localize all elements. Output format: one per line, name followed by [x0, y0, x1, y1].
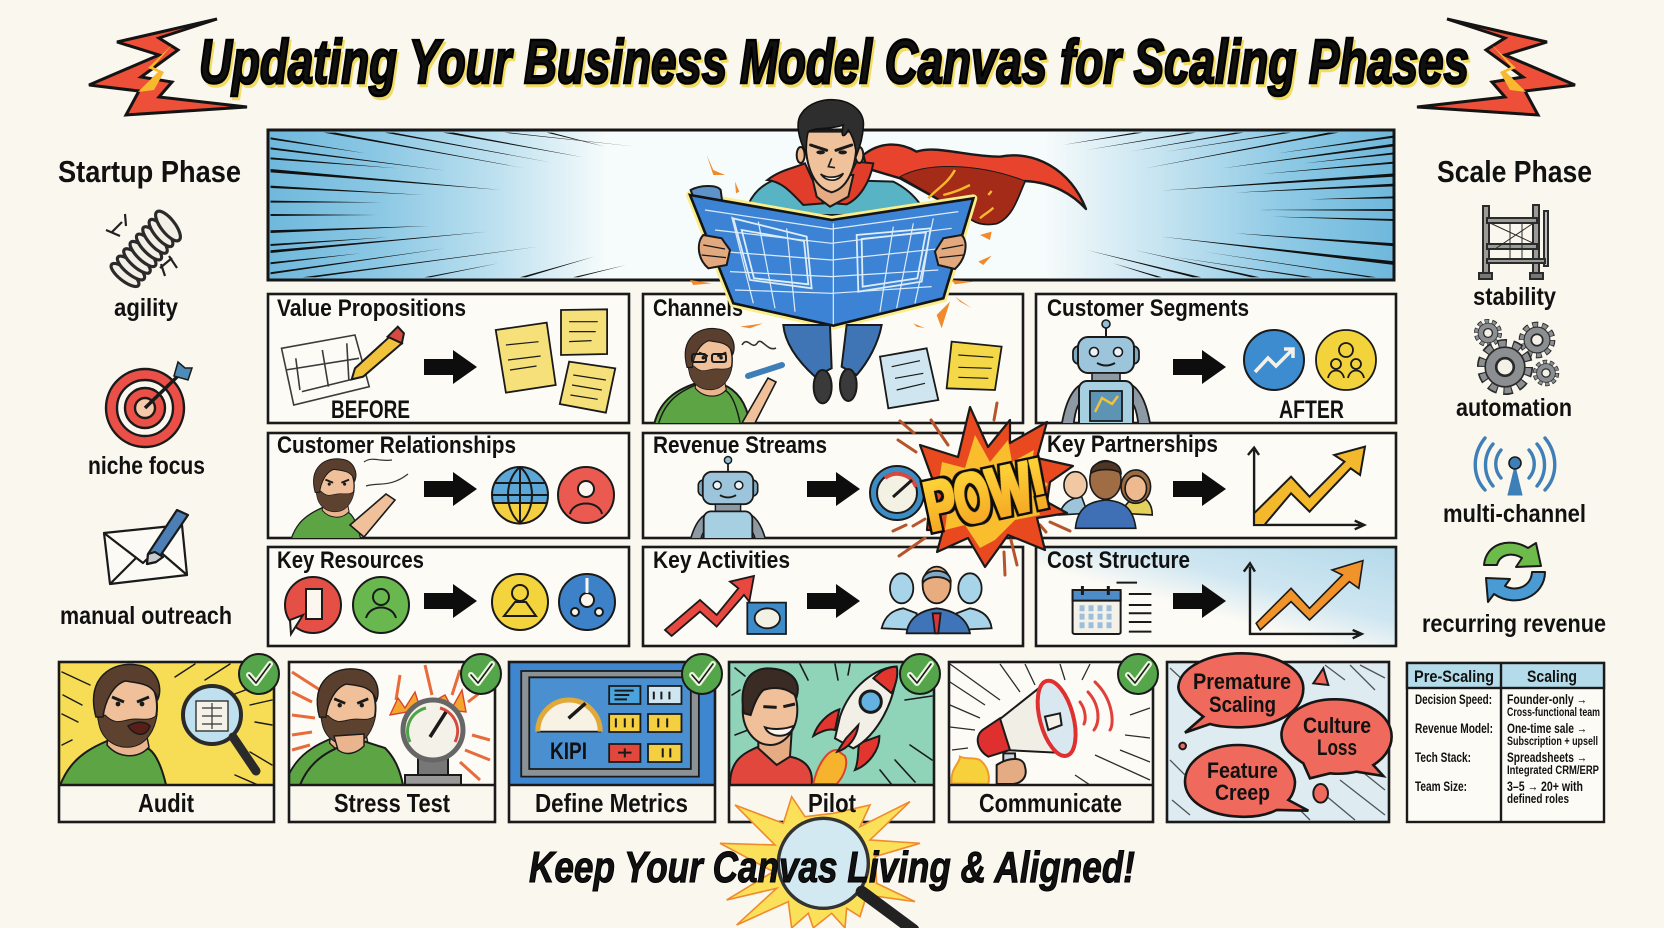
icon: robot	[690, 456, 766, 538]
bubble: feature creep: Creep	[1215, 780, 1270, 805]
bubble: premature scaling: Scaling	[1209, 692, 1276, 717]
illustration: man with pressure gauge	[290, 664, 490, 784]
panel: channels	[642, 292, 1024, 424]
arrow	[1173, 472, 1226, 506]
table header: Pre-Scaling	[1414, 667, 1494, 686]
illustration: KPI dashboard	[521, 671, 699, 777]
torso	[748, 178, 921, 215]
label: define metrics: Define Metrics	[535, 788, 688, 818]
icon: pinned note	[880, 342, 1002, 408]
icon: antenna (multi-channel)	[1475, 438, 1555, 495]
bubble: feature creep	[1185, 745, 1308, 817]
icon: yellow person badge	[492, 574, 548, 630]
panel: cost structure	[1036, 547, 1396, 646]
icon: team of three	[882, 567, 992, 633]
label: recurring revenue: recurring revenue	[1422, 610, 1606, 638]
icon: blue growth badge	[1244, 330, 1304, 390]
footer tagline: Keep Your Canvas Living & Aligned!	[529, 843, 1135, 892]
label: stress test: Stress Test	[334, 788, 450, 818]
arrow	[807, 584, 860, 618]
hands	[699, 235, 730, 268]
table row: team size: Team Size:	[1415, 778, 1467, 794]
arrow	[424, 350, 477, 384]
arrow	[424, 472, 477, 506]
illustration: megaphone	[950, 664, 1150, 785]
sparks	[690, 155, 992, 328]
icon: sketched grid and pencil	[282, 327, 404, 405]
table row: tech stack: Tech Stack:	[1415, 749, 1471, 765]
label: agility: agility	[114, 294, 178, 322]
POW burst	[893, 403, 1073, 575]
icon: person badge red	[558, 467, 614, 523]
heading: key partnerships: Key Partnerships	[1047, 431, 1218, 458]
heading: customer segments: Customer Segments	[1047, 295, 1249, 322]
neck	[812, 175, 853, 207]
table row: revenue model: Subscription + upsell	[1507, 734, 1598, 748]
text: POW!: POW!	[918, 444, 1053, 546]
hero legs	[783, 325, 882, 403]
panel: pitfalls speech bubbles	[1167, 653, 1392, 822]
table row: tech stack: Integrated CRM/ERP	[1507, 763, 1599, 777]
hero: superhero holding glowing blueprint	[690, 100, 1086, 328]
panel: revenue streams	[642, 432, 1024, 540]
icon: recurring arrows (recurring revenue)	[1484, 543, 1545, 602]
icon: scaffold (stability)	[1479, 205, 1548, 279]
heading: key resources: Key Resources	[277, 547, 424, 574]
blueprint sheet	[690, 195, 973, 326]
icon: robot	[1061, 319, 1151, 423]
step panel: audit	[52, 662, 274, 822]
icon: calendar and checklist	[1073, 583, 1151, 634]
heading: key activities: Key Activities	[653, 547, 790, 574]
title lightning bolt right	[1417, 19, 1575, 115]
heading: customer relationships: Customer Relationships	[277, 432, 516, 459]
left column heading: startup phase: Startup Phase	[58, 154, 241, 189]
table row: tech stack	[1415, 749, 1599, 777]
panel: key partnerships	[1036, 431, 1396, 538]
icon: target (niche focus)	[106, 362, 192, 447]
heading: value propositions: Value Propositions	[277, 295, 466, 322]
illustration: three partners	[1059, 461, 1152, 528]
arrow	[424, 584, 477, 618]
table row: decision speed	[1415, 691, 1600, 719]
icon: gears (automation)	[1476, 321, 1557, 390]
collar cape	[767, 162, 873, 205]
table row: team size: 3–5 → 20+ with	[1507, 778, 1583, 794]
label: audit: Audit	[138, 788, 194, 818]
chart: rising orange arrow	[1244, 561, 1363, 638]
bubble: culture loss: Culture	[1303, 713, 1371, 738]
right column heading: scale phase: Scale Phase	[1437, 154, 1592, 189]
panel: key resources	[268, 547, 629, 646]
heading: revenue streams: Revenue Streams	[653, 432, 827, 459]
decorations	[1179, 668, 1328, 803]
bubble: feature creep: Feature	[1207, 758, 1278, 783]
bubble: premature scaling	[1178, 653, 1303, 733]
label: before: BEFORE	[331, 396, 410, 424]
table row: decision speed: Decision Speed:	[1415, 691, 1492, 707]
icon: envelope and pen (manual outreach)	[104, 510, 188, 584]
table header: Scaling	[1527, 667, 1577, 686]
icon: yellow team badge	[1316, 330, 1376, 390]
panel: key activities	[643, 547, 1023, 646]
table row: decision speed: Founder-only →	[1507, 691, 1587, 707]
icon: red growth arrow and disc	[665, 576, 786, 636]
arrow	[807, 472, 860, 506]
panel: customer segments	[1034, 292, 1398, 424]
hero speed-line banner	[268, 130, 1394, 280]
panel: customer relationships	[266, 432, 630, 540]
table row: revenue model: One-time sale →	[1507, 720, 1587, 736]
text: KIPI: KIPI	[550, 738, 587, 765]
heading: cost structure: Cost Structure	[1047, 547, 1190, 574]
bubble: culture loss: Loss	[1317, 735, 1357, 760]
title lightning bolt left	[89, 19, 247, 115]
icon: spring (agility)	[106, 208, 185, 290]
cape	[863, 145, 1086, 224]
label: niche focus: niche focus	[88, 452, 205, 480]
label: stability: stability	[1473, 283, 1556, 311]
label: manual outreach: manual outreach	[60, 602, 232, 630]
glow	[690, 195, 973, 326]
icon: check badges	[239, 654, 1158, 694]
illustration: man with magnifier	[60, 663, 273, 784]
arrow	[1173, 584, 1226, 618]
comparison table	[1407, 663, 1604, 822]
face	[797, 147, 805, 163]
heading: channels: Channels	[653, 295, 743, 322]
table row: revenue model	[1415, 720, 1598, 748]
footer burst with magnifying glass	[720, 797, 920, 928]
bubble: culture loss	[1281, 699, 1392, 778]
label: multi-channel: multi-channel	[1443, 500, 1586, 528]
bubble: premature scaling: Premature	[1193, 669, 1291, 694]
step panel: pilot	[729, 662, 934, 822]
hair	[798, 100, 863, 155]
table row: revenue model: Revenue Model:	[1415, 720, 1493, 736]
table row: team size	[1415, 778, 1583, 806]
table row: tech stack: Spreadsheets →	[1507, 749, 1587, 765]
label: pilot: Pilot	[808, 788, 856, 818]
illustration: bearded man with marker	[654, 328, 785, 423]
label: communicate: Communicate	[979, 788, 1122, 818]
illustration: man and rocket	[730, 664, 932, 785]
table row: team size: defined roles	[1507, 791, 1569, 806]
table row: decision speed: Cross-functional team	[1507, 705, 1600, 719]
panel: value propositions	[268, 294, 629, 424]
blueprint roll	[691, 186, 723, 205]
icon: globe	[492, 467, 548, 524]
illustration: man writing	[291, 458, 408, 538]
chart: rising yellow arrow	[1248, 447, 1365, 529]
icon: blue network badge	[559, 574, 615, 630]
label: after: AFTER	[1279, 396, 1344, 424]
step panel: stress test	[279, 662, 495, 822]
arrow	[1173, 350, 1226, 384]
label: automation: automation	[1456, 394, 1572, 422]
icon: green person badge	[353, 577, 409, 633]
table header	[1414, 667, 1577, 686]
icon: gauge	[870, 466, 924, 520]
step panel: define metrics	[509, 662, 715, 822]
icon: sticky notes	[496, 309, 615, 413]
step panel: communicate	[949, 662, 1153, 822]
icon: red speech badge	[285, 577, 341, 634]
